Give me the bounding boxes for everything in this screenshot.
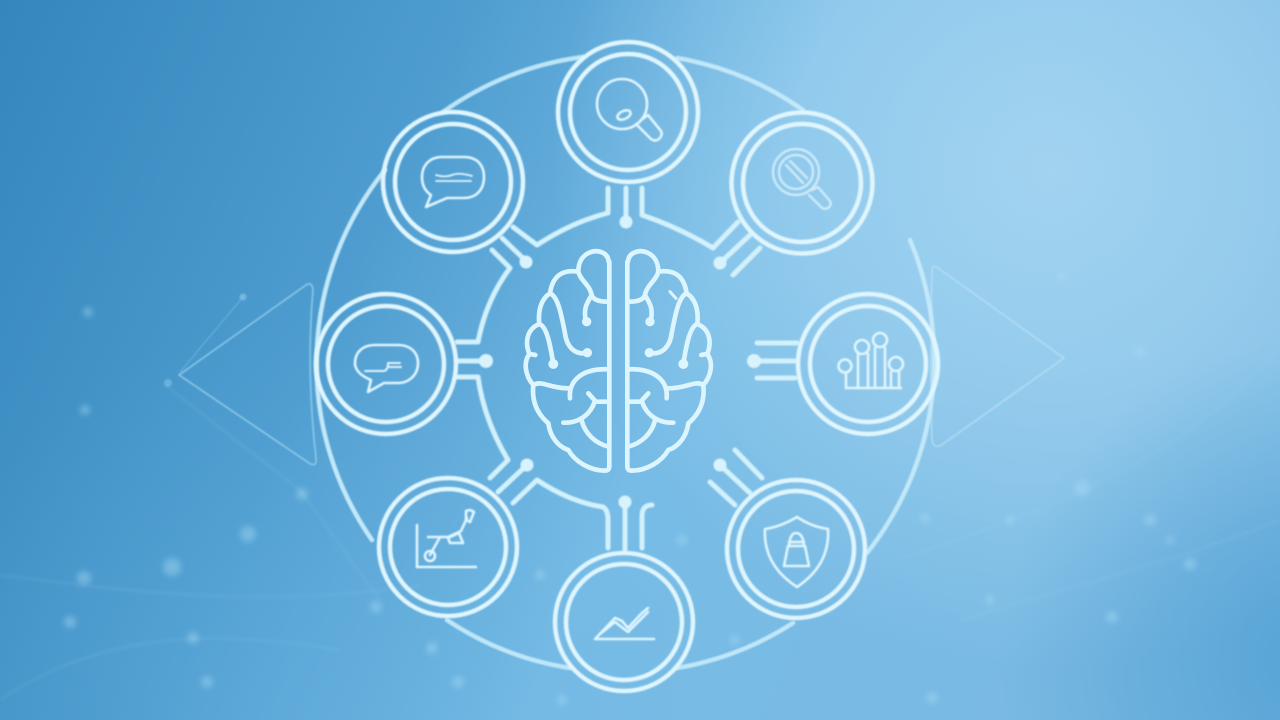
connector end dots bbox=[479, 216, 761, 508]
outer ring arcs bbox=[317, 57, 934, 668]
background network lines bbox=[0, 350, 1280, 700]
background network nodes bbox=[64, 271, 1196, 705]
node: left speech bubble bbox=[316, 294, 456, 434]
brain left hemisphere bbox=[526, 251, 609, 471]
central brain bbox=[526, 251, 711, 471]
node: top-left speech bubble bbox=[383, 112, 523, 252]
circuit connectors bbox=[457, 188, 797, 550]
left triangle outline bbox=[164, 284, 316, 465]
right triangle outline bbox=[931, 266, 1064, 446]
node: right bar icon bbox=[798, 294, 938, 434]
node: top-right magnifier bbox=[732, 112, 872, 254]
node: top magnifier bbox=[558, 42, 698, 182]
node: bottom-left line chart bbox=[379, 478, 517, 616]
node: bottom-center trend chart bbox=[555, 553, 693, 691]
node: bottom-right shield bbox=[727, 480, 865, 618]
brain right hemisphere bbox=[627, 251, 711, 471]
